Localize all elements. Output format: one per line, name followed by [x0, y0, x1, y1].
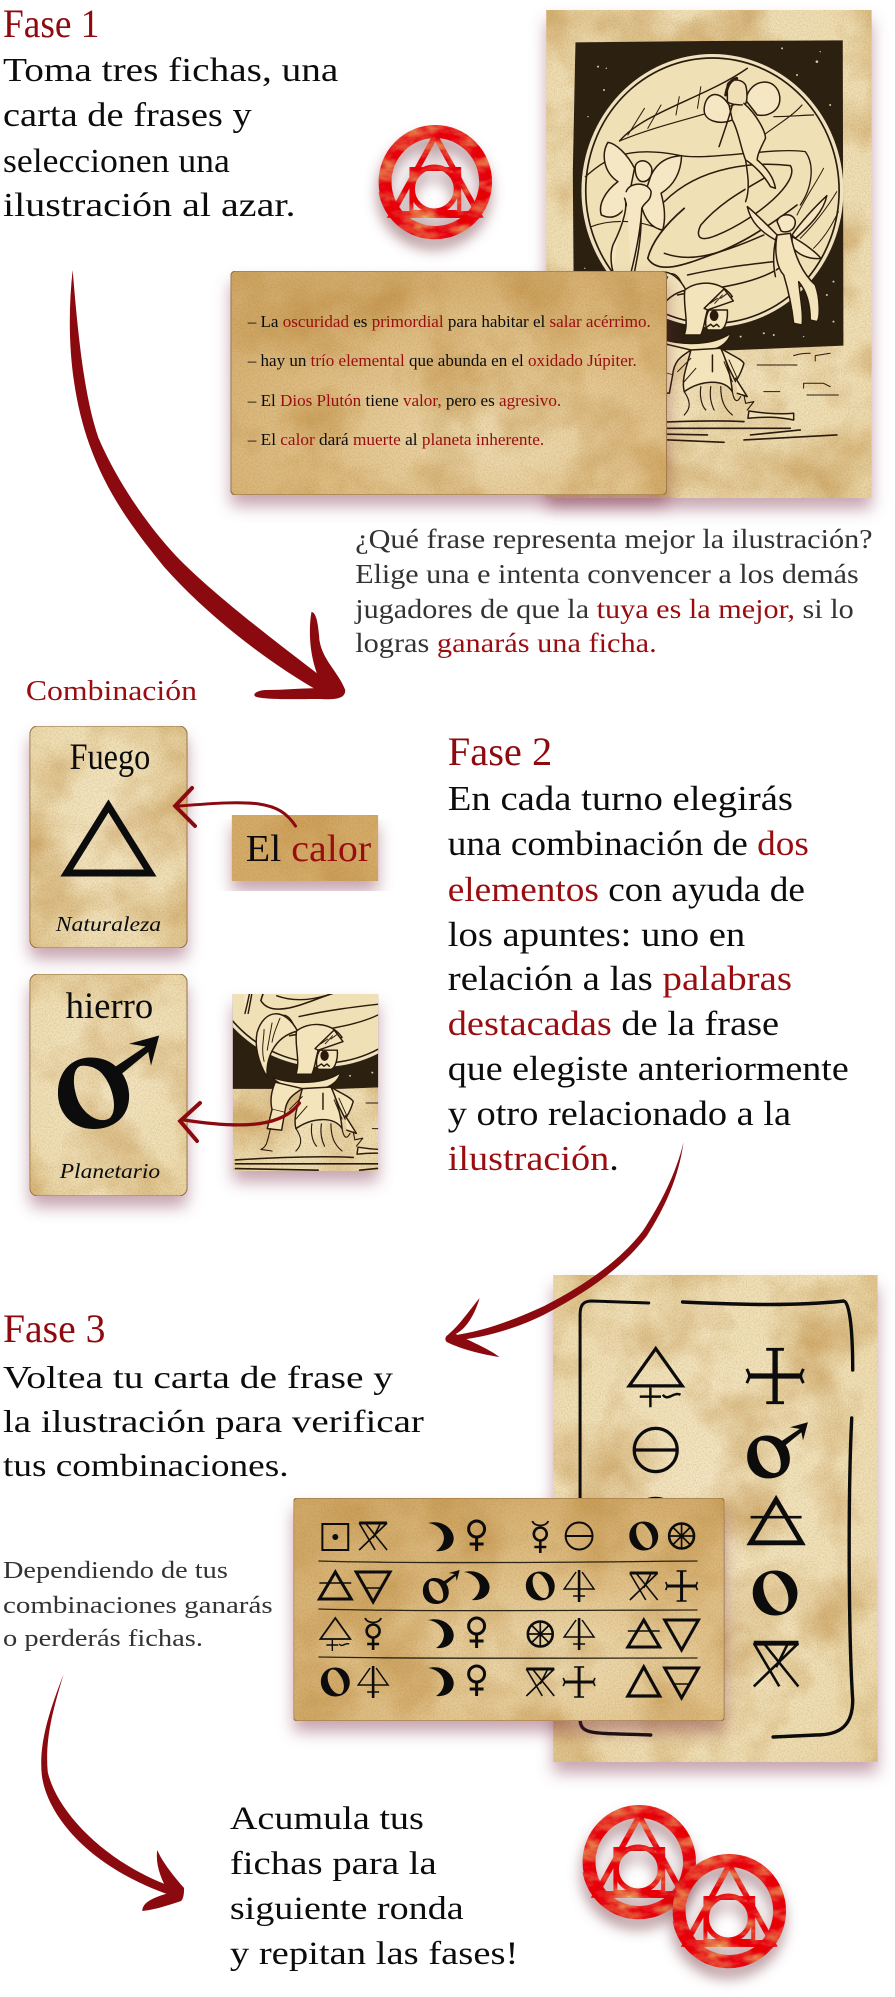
card: Fuego: Naturaleza — [55, 912, 161, 936]
illustration crop: knight — [222, 994, 388, 1192]
text block: question: ¿Qué frase representa mejor la ilustración? — [355, 524, 873, 554]
text block: question — [354, 524, 873, 658]
illustration card: fairies and knight — [546, 10, 872, 498]
text block: fase 2 instructions: y otro relacionado a la — [448, 1094, 792, 1133]
text block: fase 2 instructions: que elegiste anteriormente — [448, 1049, 849, 1088]
text block: fase 2 instructions: elementos con ayuda de — [448, 870, 805, 909]
icon: token pile back — [583, 1812, 690, 1919]
phrase lines: – El calor dará muerte al planeta inherente. — [247, 430, 544, 449]
chip: El calor — [232, 815, 378, 881]
card border — [580, 1301, 853, 1737]
text block: accumulate tokens: fichas para la — [230, 1846, 437, 1882]
phrase lines: – El Dios Plutón tiene valor, pero es agresivo. — [247, 391, 561, 410]
heading: Fase 3: Fase 3 — [3, 1306, 105, 1351]
card: Fuego: Fuego — [70, 736, 150, 777]
text block: fase 2 instructions: los apuntes: uno en — [448, 915, 745, 954]
text block: accumulate tokens: y repitan las fases! — [230, 1936, 518, 1972]
text block: fase 3 instructions: Voltea tu carta de frase y — [3, 1360, 393, 1395]
text block: fase 2 instructions: relación a las palabras — [448, 959, 792, 998]
text block: fase 1 instructions — [3, 52, 338, 224]
arrow: calor to Fuego — [175, 788, 296, 826]
row rules — [318, 1561, 697, 1658]
text block: accumulate tokens: Acumula tus — [230, 1801, 424, 1837]
arrow: fase 2 to fase 3 — [445, 1142, 684, 1357]
text block: fase 2 instructions: En cada turno elegirás — [448, 779, 793, 818]
symbol row 3 — [320, 1618, 698, 1651]
chip: El calor: El calor — [246, 828, 372, 870]
symbols card — [553, 1275, 878, 1762]
card: Hierro: hierro — [66, 985, 153, 1026]
text block: fase 3 instructions — [3, 1360, 424, 1483]
text block: fase 3 instructions: tus combinaciones. — [3, 1448, 289, 1483]
phrase lines — [247, 312, 651, 449]
phrase lines: – hay un trío elemental que abunda en el oxidado Júpiter. — [247, 351, 637, 370]
phrase card — [231, 271, 667, 495]
card: Hierro: Planetario — [59, 1159, 160, 1183]
icon: red token — [379, 132, 486, 239]
text block: question: jugadores de que la tuya es la mejor, si lo — [354, 594, 854, 624]
text block: gain or lose: combinaciones ganarás — [3, 1593, 273, 1619]
text block: fase 1 instructions: carta de frases y — [3, 97, 252, 134]
heading: Fase 1: Fase 1 — [3, 1, 99, 46]
arrow: knight to Hierro — [180, 1103, 299, 1141]
text block: fase 2 instructions: destacadas de la frase — [448, 1004, 779, 1043]
symbol row 4 — [321, 1666, 698, 1698]
text block: accumulate tokens: siguiente ronda — [230, 1891, 464, 1927]
icon: token pile front — [673, 1860, 780, 1968]
text block: fase 3 instructions: la ilustración para verificar — [3, 1404, 424, 1439]
text block: fase 2 instructions: ilustración . — [448, 1139, 619, 1178]
text block: fase 1 instructions: seleccionen una — [3, 143, 230, 180]
text block: question: Elige una e intenta convencer a los demás — [355, 559, 859, 589]
phrase lines: – La oscuridad es primordial para habitar el salar acérrimo. — [247, 312, 651, 331]
heading: Combinación: Combinación — [26, 675, 198, 707]
heading: Fase 2: Fase 2 — [448, 729, 552, 774]
text block: gain or lose: Dependiendo de tus — [3, 1558, 228, 1584]
text block: fase 1 instructions: ilustración al azar. — [3, 187, 296, 224]
card: Fuego — [30, 726, 187, 948]
text block: fase 2 instructions: una combinación de dos — [448, 824, 809, 863]
text block: gain or lose: o perderás fichas. — [3, 1626, 203, 1652]
combinations card — [294, 1498, 724, 1721]
text block: question: logras ganarás una ficha. — [355, 628, 657, 658]
text block: fase 1 instructions: Toma tres fichas, una — [3, 52, 338, 89]
symbol row 1 — [322, 1521, 695, 1553]
symbol row 2 — [319, 1570, 697, 1604]
text block: gain or lose — [3, 1558, 273, 1652]
card: Hierro — [30, 974, 187, 1196]
text block: fase 2 instructions — [448, 779, 849, 1178]
arrow: fase 1 to combination — [70, 270, 345, 699]
text block: accumulate tokens — [230, 1801, 518, 1972]
arrow: to final step — [41, 1674, 184, 1911]
